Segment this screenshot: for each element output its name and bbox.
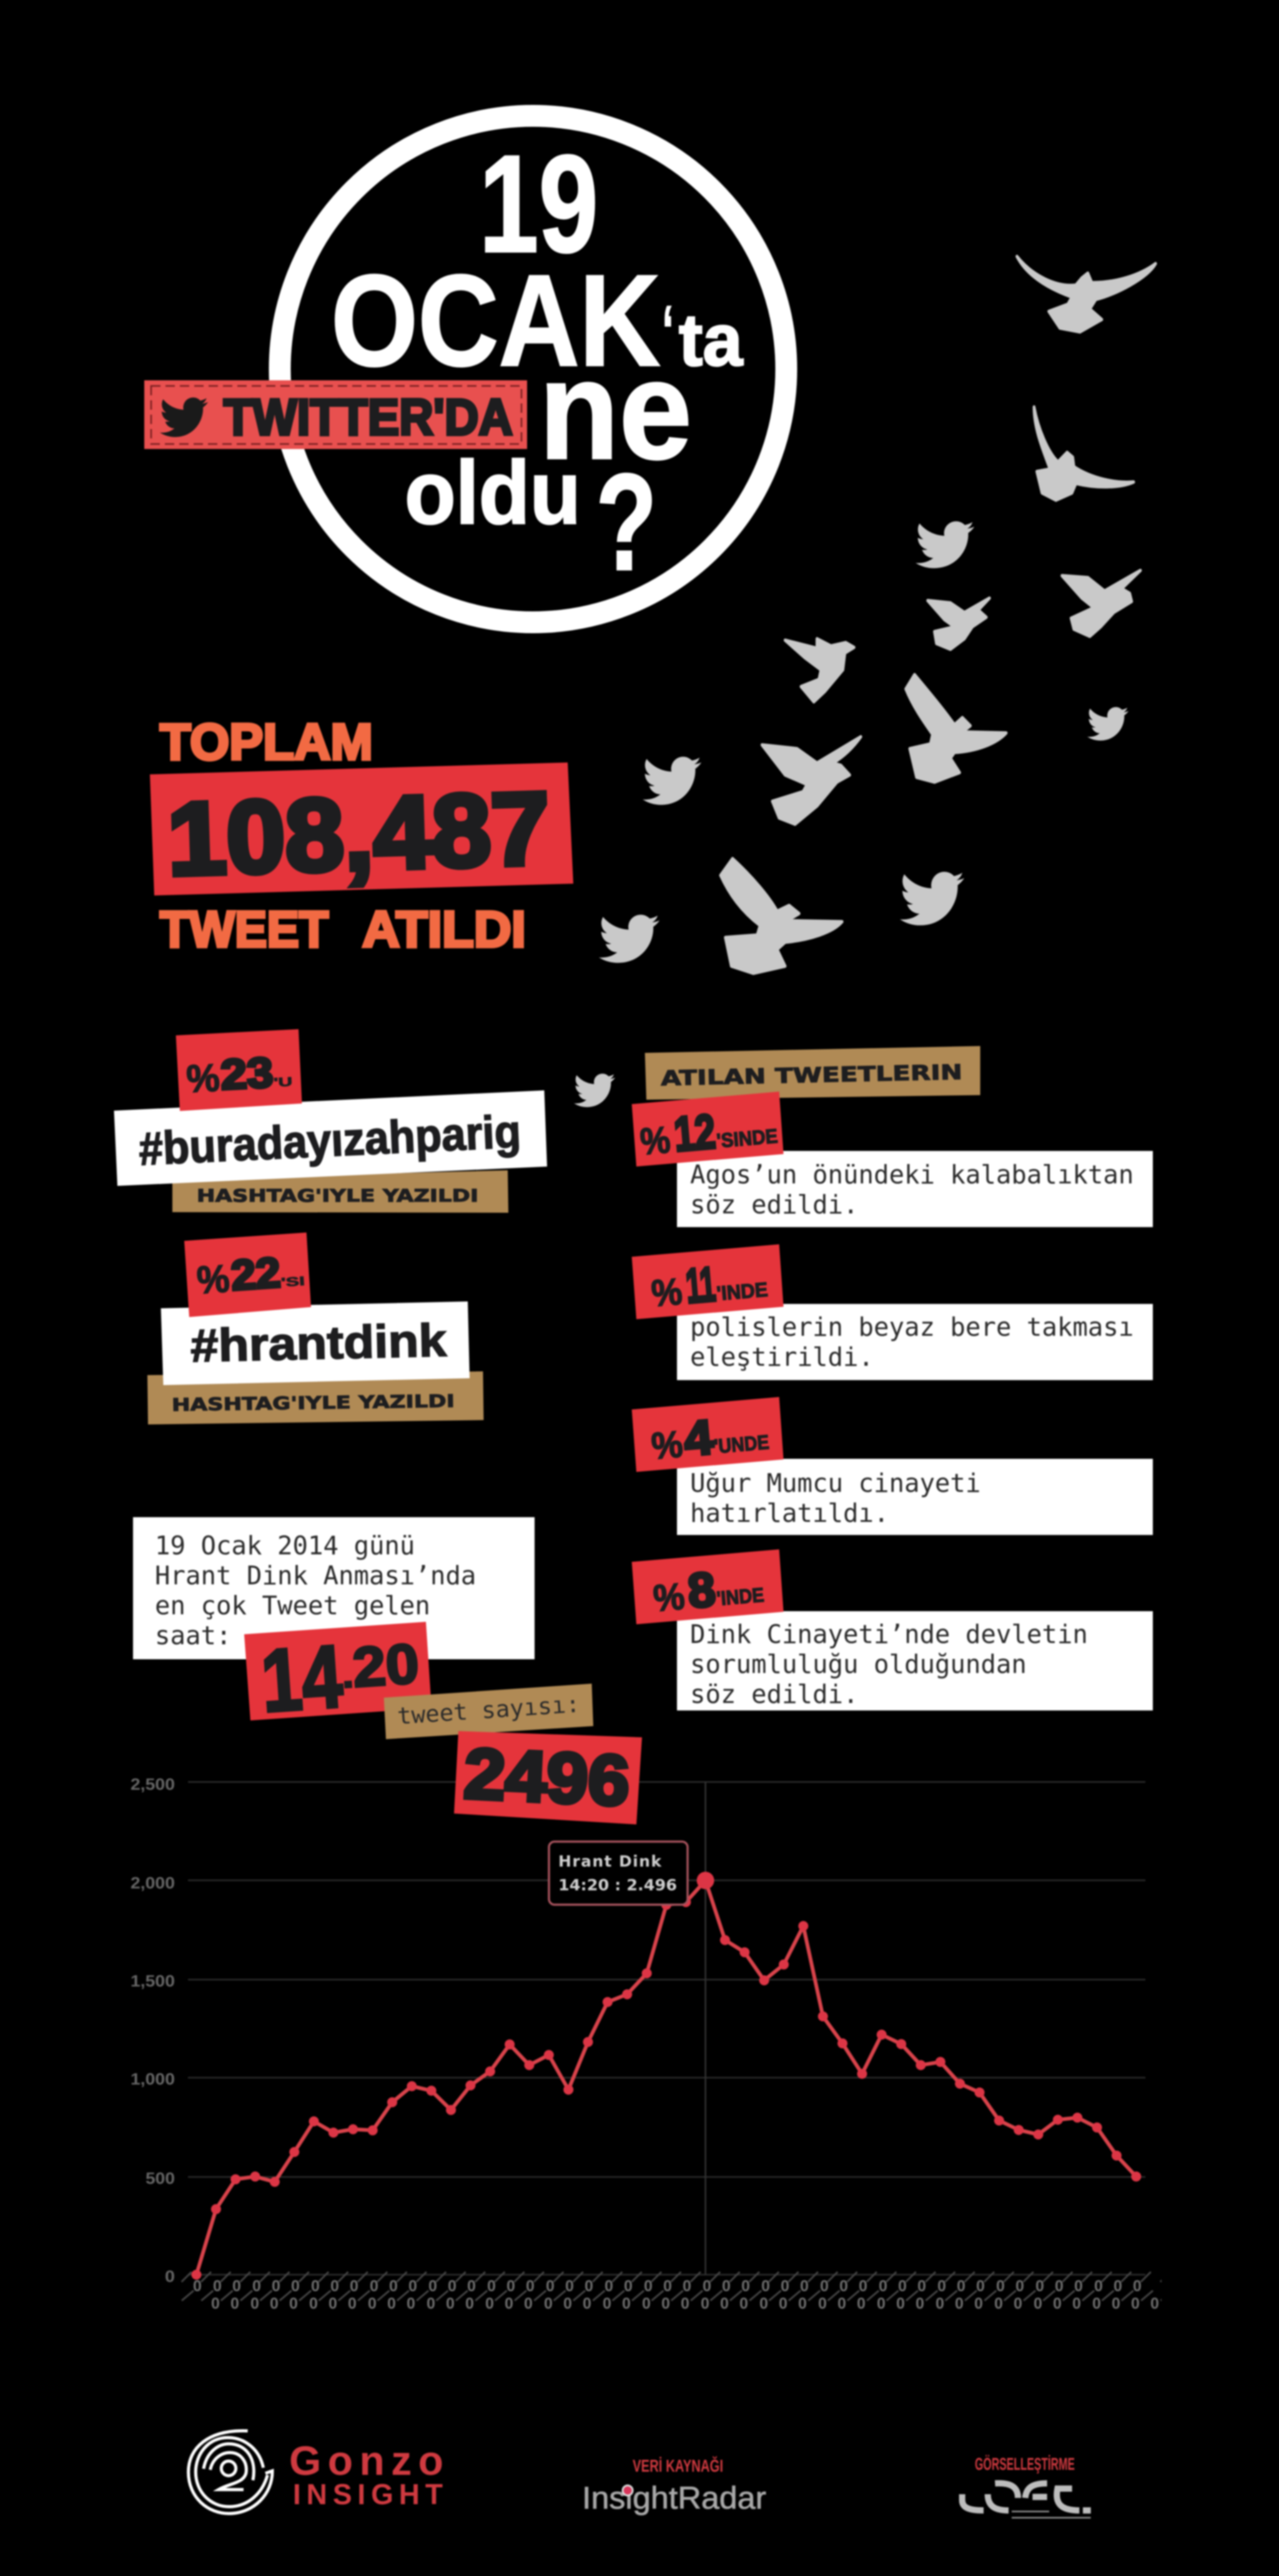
- percent tag: %: [651, 1575, 686, 1619]
- tooltip: 14:20 : 2.496: [558, 1876, 677, 1894]
- tweet count label: [384, 1684, 593, 1739]
- title: OCAK'ta: ta: [679, 299, 743, 382]
- percent tag: 4: [682, 1409, 715, 1466]
- data line: [196, 1880, 1136, 2274]
- caption strip: [172, 1170, 508, 1213]
- grid lines: [188, 1782, 1145, 2274]
- footer logos: [189, 2430, 1091, 2518]
- twitter birds: [599, 521, 1128, 963]
- percent tag: 'INDE: [716, 1278, 769, 1305]
- title circle: [280, 116, 786, 622]
- peak hour callout: [133, 1517, 642, 1825]
- total tweets block: [150, 714, 573, 958]
- heading: toplam: TOPLAM: [160, 714, 373, 771]
- peak time tag: [244, 1621, 432, 1731]
- text box: [677, 1611, 1153, 1710]
- text box: Hrant Dink Anması’nda: [155, 1561, 476, 1591]
- text box: Agos’un önündeki kalabalıktan: [690, 1160, 1133, 1190]
- y axis labels: 1,000: [131, 2070, 175, 2088]
- percent tag: %: [649, 1423, 684, 1467]
- logo: Gonzo Insight: INSIGHT: [293, 2478, 443, 2510]
- title: oldu: oldu: [405, 443, 581, 543]
- y axis labels: 0: [165, 2267, 175, 2286]
- logo: InsightRadar data source: VERİ KAYNAĞI: [633, 2456, 723, 2475]
- spiral mark: [189, 2430, 272, 2514]
- caption strip: HASHTAG'IYLE YAZILDI: [172, 1391, 455, 1415]
- text box: polislerin beyaz bere takması: [690, 1312, 1133, 1342]
- logo: InsightRadar data source: [582, 2456, 766, 2515]
- heading: tweet atıldı: TWEET: [160, 901, 328, 958]
- percent tag: 'INDE: [716, 1584, 765, 1610]
- topic 11 percent: [632, 1244, 1153, 1380]
- tweet count tag: 2496: [462, 1734, 631, 1821]
- peak time tag: .: [340, 1653, 355, 1695]
- logo: InsightRadar data source: InsightRadar: [582, 2480, 766, 2515]
- wordmark: Gonzo: [289, 2437, 443, 2484]
- tooltip: Hrant Dink: [558, 1852, 662, 1870]
- text box: en çok Tweet gelen: [155, 1591, 430, 1621]
- text box: [677, 1151, 1153, 1227]
- x axis labels: 0000000000000000000000000000000000000000000000000: [193, 2277, 1142, 2295]
- banner: Twitter'da: TWITTER'DA: [224, 389, 513, 446]
- percent tag: 'SINDE: [716, 1125, 779, 1152]
- text box: [133, 1517, 535, 1659]
- percent tag 23: [176, 1029, 302, 1111]
- text box: söz edildi.: [690, 1679, 858, 1709]
- title badge: [144, 116, 786, 622]
- percent tag: 8: [686, 1561, 718, 1619]
- percent tag 23: 23: [219, 1049, 274, 1098]
- y axis labels: 2,500: [131, 1775, 175, 1794]
- hashtag strip: #hrantdink: [190, 1314, 448, 1372]
- percent tag: [632, 1397, 784, 1472]
- percent tag: 12: [672, 1103, 718, 1162]
- text box: Dink Cinayeti’nde devletin: [690, 1619, 1088, 1649]
- title: question mark: ?: [596, 445, 657, 599]
- logo: visualisation credit: GÖRSELLEŞTİRME: [975, 2454, 1075, 2474]
- text box: Uğur Mumcu cinayeti: [690, 1468, 980, 1498]
- text box: [677, 1459, 1153, 1535]
- peak time tag: 14: [259, 1627, 345, 1731]
- banner: Twitter'da: [144, 380, 527, 449]
- header strip: atılan tweetlerin: [645, 1046, 980, 1100]
- percent tag: [632, 1244, 784, 1319]
- percent tag: [632, 1092, 784, 1167]
- percent tag 23: 'U: [274, 1075, 293, 1090]
- y axis labels: 1,500: [131, 1971, 175, 1990]
- doves and twitter birds flock: [599, 257, 1155, 974]
- text box: söz edildi.: [690, 1190, 858, 1220]
- heading: tweet atıldı: ATILDI: [362, 901, 526, 958]
- hashtag strip: [161, 1301, 470, 1385]
- text box: saat:: [155, 1621, 231, 1651]
- topic 8 percent: [632, 1549, 1153, 1710]
- percent tag 22: 'SI: [280, 1275, 305, 1290]
- title: ne: ne: [539, 331, 692, 488]
- topic 4 percent: [632, 1397, 1153, 1535]
- data point markers: [191, 1872, 1141, 2279]
- x axis labels: [181, 2267, 1162, 2312]
- peak time tag: 20: [350, 1632, 421, 1699]
- text box: sorumluluğu olduğundan: [690, 1649, 1027, 1679]
- logo: Gonzo Insight: [189, 2430, 443, 2514]
- icon: twitter bird: [160, 397, 208, 437]
- y axis labels: [131, 1775, 175, 2286]
- y axis labels: 500: [146, 2169, 175, 2188]
- percent tag: [632, 1549, 784, 1624]
- tooltip: [549, 1842, 688, 1905]
- percent tag 22: [184, 1233, 311, 1317]
- logo: visualisation credit: [962, 2454, 1091, 2518]
- percent tag: 'UNDE: [713, 1431, 770, 1458]
- hashtag 2 panel: [147, 1233, 483, 1424]
- percent tag: 11: [684, 1256, 718, 1313]
- y axis labels: 2,000: [131, 1873, 175, 1892]
- title: 19: 19: [479, 127, 598, 282]
- title: OCAK'ta: OCAK: [331, 249, 660, 393]
- caption strip: [147, 1371, 483, 1424]
- x axis labels: 0000000000000000000000000000000000000000000000000: [211, 2295, 1159, 2312]
- doves: [721, 257, 1155, 974]
- text box: [677, 1304, 1153, 1380]
- percent tag 23: %: [185, 1056, 220, 1101]
- icon: small twitter bird: [574, 1073, 615, 1107]
- percent tag 22: %: [195, 1257, 231, 1302]
- hashtag strip: #buradayızahparig: [138, 1105, 522, 1175]
- text box: 19 Ocak 2014 günü: [155, 1531, 415, 1561]
- percent tag: %: [639, 1118, 672, 1163]
- heading: tweet atıldı: [160, 901, 526, 958]
- topic 12 percent: [632, 1092, 1153, 1227]
- hashtag 1 panel: [114, 1029, 547, 1213]
- header strip: atılan tweetlerin: ATILAN TWEETLERIN: [661, 1060, 962, 1090]
- percent tag 22: 22: [229, 1248, 282, 1300]
- text box: eleştirildi.: [690, 1342, 874, 1372]
- tweet count label: tweet sayısı:: [397, 1690, 581, 1730]
- title: OCAK'ta: ‘: [663, 292, 673, 367]
- percent tag: %: [649, 1270, 684, 1315]
- text box: hatırlatıldı.: [690, 1498, 889, 1528]
- total tweets number panel: 108,487: [166, 771, 551, 897]
- line chart: tweets over time: [131, 1775, 1162, 2312]
- caption strip: HASHTAG'IYLE YAZILDI: [197, 1185, 478, 1206]
